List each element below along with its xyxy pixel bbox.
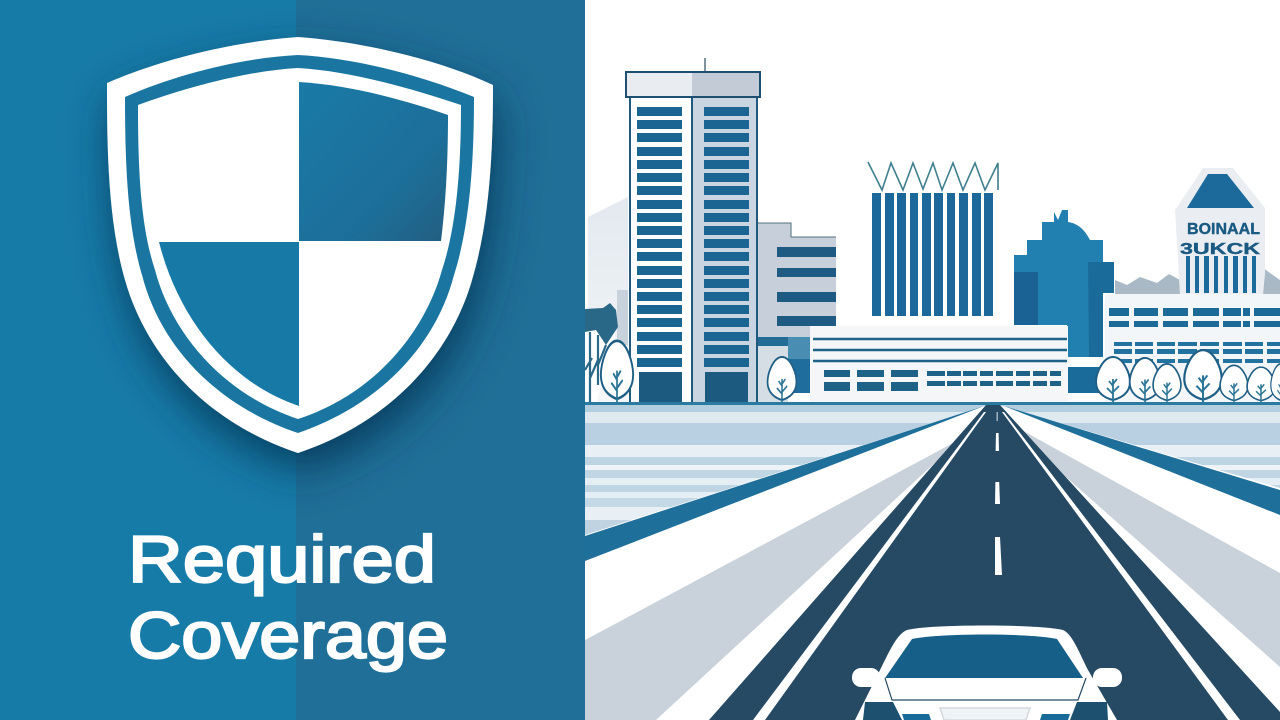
- windshield: [885, 634, 1083, 678]
- building: main tower: [626, 58, 760, 403]
- headlights: [863, 702, 1108, 720]
- lane edge lines: [753, 412, 986, 720]
- tower sign text: BOINAAL: [1187, 221, 1260, 238]
- tower sign text: 3UKCK: [1180, 241, 1261, 258]
- icon: shield: [107, 37, 493, 453]
- grille: [940, 708, 1030, 720]
- building: right low block: [1105, 294, 1280, 403]
- building: low central block: [810, 326, 1068, 403]
- panel: city and road scene: [585, 0, 1280, 720]
- centre dashes: [996, 412, 998, 421]
- water bands: [585, 405, 1280, 545]
- tower windows: [637, 107, 749, 367]
- building: blue dome tower: [1014, 210, 1114, 393]
- car mirrors: [852, 668, 1122, 687]
- title: Required Coverage: Required: [128, 522, 436, 596]
- building: crown tower: [868, 162, 998, 316]
- road: shoulders and median strips: [585, 406, 1280, 720]
- car: [852, 626, 1122, 720]
- building: side block: [757, 223, 836, 403]
- road: asphalt: [709, 405, 1280, 720]
- title: Required Coverage: Coverage: [128, 598, 448, 672]
- panel: left shield panel: [0, 0, 585, 720]
- car body: [855, 626, 1117, 720]
- background hills: [588, 197, 1280, 403]
- trees: right cluster: [1096, 350, 1280, 403]
- trees: left cluster: [585, 303, 796, 403]
- hood lines: [885, 678, 1086, 700]
- building: right clock tower: [1175, 168, 1265, 295]
